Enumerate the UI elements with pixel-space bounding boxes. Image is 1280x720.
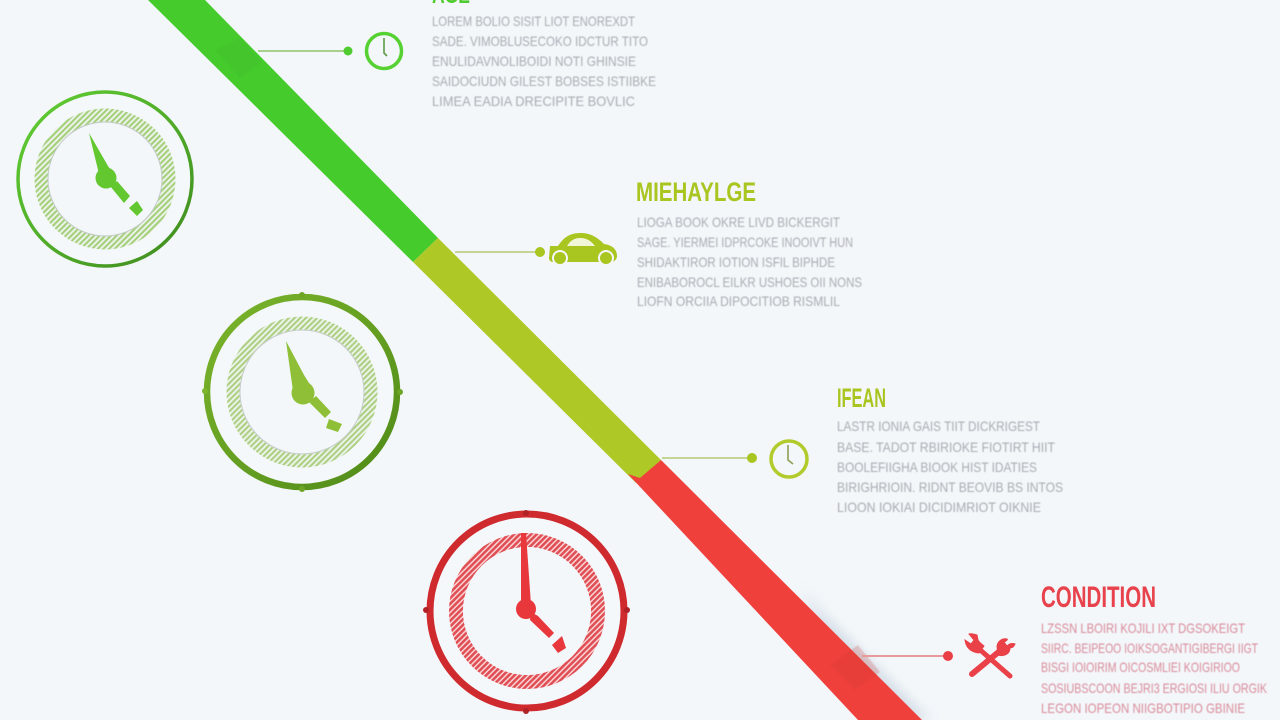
callout: condition [862, 581, 1267, 716]
band segment: red [628, 460, 922, 720]
text block [837, 418, 1063, 515]
text block: LOREM BOLIO SISIT LIOT ENOREXDT [432, 13, 635, 29]
band segment: olive [413, 238, 661, 483]
connector [455, 247, 545, 257]
callout: mileage [455, 177, 862, 309]
icon: car [549, 233, 617, 266]
text block [637, 214, 862, 309]
dial: red [423, 510, 630, 714]
text block: BIRIGHRIOIN. RIDNT BEOVIB BS INTOS [837, 479, 1063, 495]
needle [89, 133, 143, 216]
dial: olive green [202, 292, 403, 492]
band shade: red end [830, 645, 880, 690]
heading: CONDITION [1041, 581, 1156, 614]
text block: SHIDAKTIROR IOTION ISFIL BIPHDE [637, 254, 835, 270]
dial: green [18, 92, 192, 266]
connector [862, 651, 953, 661]
text block: LIMEA EADIA DRECIPITE BOVLIC [432, 93, 635, 109]
callout: year [662, 383, 1063, 515]
text block: SADE. VIMOBLUSECOKO IDCTUR TITO [432, 33, 648, 49]
text block: ENULIDAVNOLIBOIDI NOTI GHINSIE [432, 53, 636, 69]
needle [286, 341, 342, 432]
heading: MIEHAYLGE [636, 177, 756, 207]
band segment: green [148, 0, 438, 262]
text block: LIOFN ORCIIA DIPOCITIOB RISMLIL [637, 293, 840, 309]
callout: age [258, 0, 656, 109]
text block: LASTR IONIA GAIS TIIT DICKRIGEST [837, 418, 1040, 434]
text block: BOOLEFIIGHA BIOOK HIST IDATIES [837, 459, 1037, 475]
diagonal band [148, 0, 930, 720]
text block: SAGE. YIERMEI IDPRCOKE INOOIVT HUN [637, 234, 853, 250]
needle [516, 533, 566, 653]
heading: IFEAN [837, 383, 886, 413]
text block [432, 13, 656, 109]
connector [258, 46, 352, 56]
icon: tools [965, 634, 1015, 676]
text block: BASE. TADOT RBIRIOKE FIOTIRT HIIT [837, 439, 1055, 455]
icon: clock green [366, 34, 402, 68]
text block: ENIBABOROCL EILKR USHOES OII NONS [637, 274, 862, 290]
text block: SAIDOCIUDN GILEST BOBSES ISTIIBKE [432, 73, 656, 89]
text block: LIOON IOKIAI DICIDIMRIOT OIKNIE [837, 499, 1041, 515]
icon: clock olive [771, 441, 807, 477]
connector [662, 453, 757, 463]
text block: LIOGA BOOK OKRE LIVD BICKERGIT [637, 214, 840, 230]
band shade: green start [215, 38, 262, 78]
text block [1041, 620, 1267, 716]
